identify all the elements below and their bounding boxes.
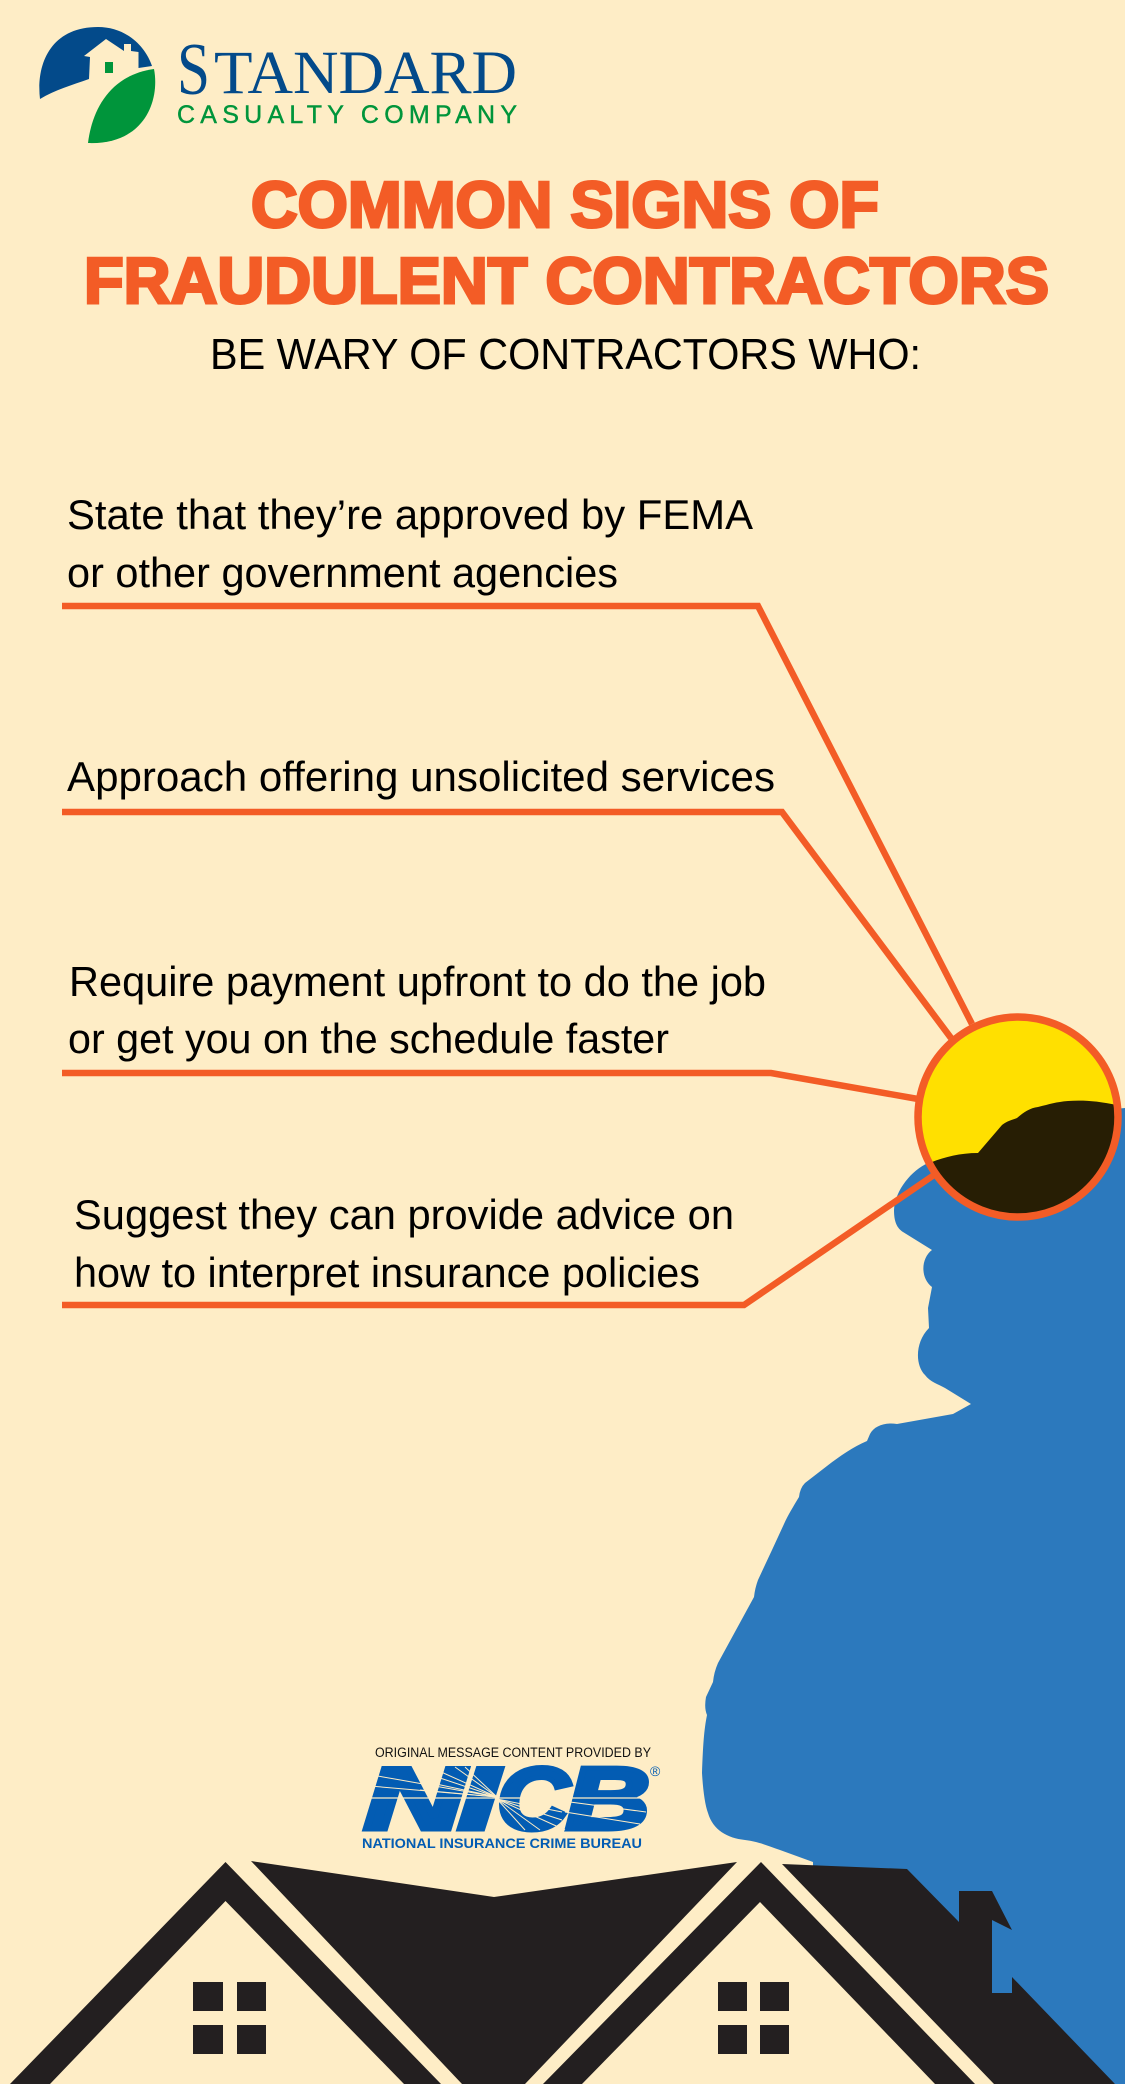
- logo: NICB: B: [566, 1749, 650, 1848]
- middle roof: [251, 1861, 737, 2084]
- arrow line 3: [62, 1073, 918, 1099]
- logo: NICB: C: [497, 1749, 571, 1848]
- title: [84, 168, 1049, 317]
- left house gable: [10, 1862, 441, 2084]
- icon: house on blue hill: [39, 27, 152, 99]
- right house gable: [543, 1862, 975, 2084]
- callout item 4: [62, 1175, 934, 1305]
- logo wordmark: CASUALTY COMPANY: [177, 101, 517, 129]
- left house window: [193, 1982, 266, 2054]
- logo wordmark: TANDARD: [214, 40, 517, 107]
- callout item 3: Require payment upfront to do the job: [69, 958, 766, 1005]
- arrow line 2: [62, 812, 951, 1038]
- callout item 1: State that they’re approved by FEMA: [67, 491, 753, 538]
- callout item 3: [62, 958, 918, 1099]
- right house window: [718, 1982, 789, 2054]
- logo: NICB: N: [364, 1749, 468, 1848]
- logo: NICB: I: [458, 1749, 501, 1848]
- title: COMMON SIGNS OF: [251, 168, 879, 241]
- icon: magnified sunglasses lens: [918, 1017, 1125, 1230]
- illustration: rooftops: [10, 1861, 1115, 2084]
- callout item 2: [62, 753, 951, 1038]
- credit line: ORIGINAL MESSAGE CONTENT PROVIDED BY: [375, 1745, 651, 1760]
- title: FRAUDULENT CONTRACTORS: [84, 244, 1049, 317]
- callout item 2: Approach offering unsolicited services: [67, 753, 775, 800]
- logo wordmark: [177, 29, 517, 129]
- logo rays: [366, 1767, 650, 1830]
- arrow line 1: [62, 606, 972, 1024]
- logo: Standard Casualty Company: [39, 27, 517, 143]
- subtitle: BE WARY OF CONTRACTORS WHO:: [210, 330, 921, 379]
- callout item 1: [62, 491, 972, 1024]
- logo: NICB: [362, 1749, 661, 1851]
- arrow line 4: [62, 1175, 934, 1305]
- callout item 4: how to interpret insurance policies: [74, 1249, 700, 1296]
- icon: house window: [105, 62, 113, 73]
- illustration: contractor silhouette: [702, 1108, 1125, 2084]
- callout item 4: Suggest they can provide advice on: [74, 1191, 734, 1238]
- registered mark: ®: [650, 1763, 661, 1779]
- logo wordmark: S: [177, 29, 210, 111]
- logo caption: NATIONAL INSURANCE CRIME BUREAU: [362, 1835, 642, 1851]
- callout item 3: or get you on the schedule faster: [68, 1015, 669, 1062]
- icon: green leaf: [88, 69, 155, 143]
- callout item 1: or other government agencies: [67, 549, 618, 596]
- right roof with chimney: [782, 1864, 1115, 2084]
